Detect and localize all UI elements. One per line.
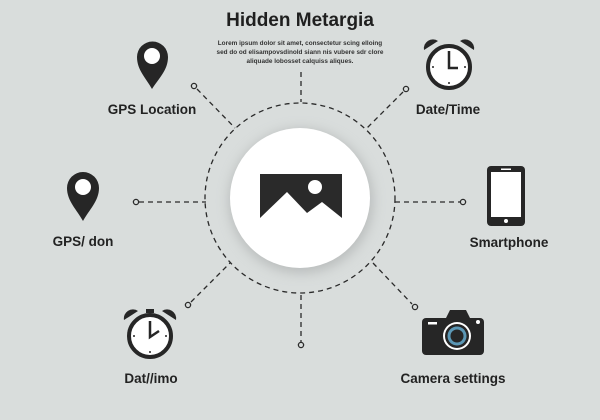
subtitle text (217, 40, 384, 65)
subtitle text: aliquade lobosset calquiss aliques. (247, 58, 354, 65)
subtitle text: Lorem ipsum dolor sit amet, consectetur scing elloing (218, 40, 382, 47)
icon: image (260, 174, 342, 218)
spoke end dots (133, 83, 466, 348)
icon: clock (124, 309, 176, 357)
title: Hidden Metargia (226, 10, 374, 31)
icon: camera (422, 310, 484, 355)
item: Dat//imo: Dat//imo (124, 371, 178, 386)
item: Date/Time (416, 39, 481, 117)
connector spokes (139, 72, 460, 342)
item: GPS/ don: GPS/ don (53, 234, 113, 249)
item: GPS/ don (53, 172, 113, 249)
item: Smartphone (470, 166, 549, 250)
item: GPS Location (108, 42, 196, 117)
item: Camera settings: Camera settings (400, 371, 506, 386)
item: Smartphone: Smartphone (470, 235, 549, 250)
icon: pin (67, 172, 99, 221)
center image circle (229, 128, 373, 273)
icon: clock (424, 39, 474, 88)
item: Dat//imo (124, 309, 178, 386)
subtitle text: sed do od elisampovsdinold siann nis vubere sdr clore (217, 49, 384, 56)
item: Camera settings (400, 310, 506, 386)
item: Date/Time: Date/Time (416, 102, 481, 117)
item: GPS Location: GPS Location (108, 102, 196, 117)
icon: pin (137, 42, 168, 89)
icon: phone (487, 166, 525, 226)
